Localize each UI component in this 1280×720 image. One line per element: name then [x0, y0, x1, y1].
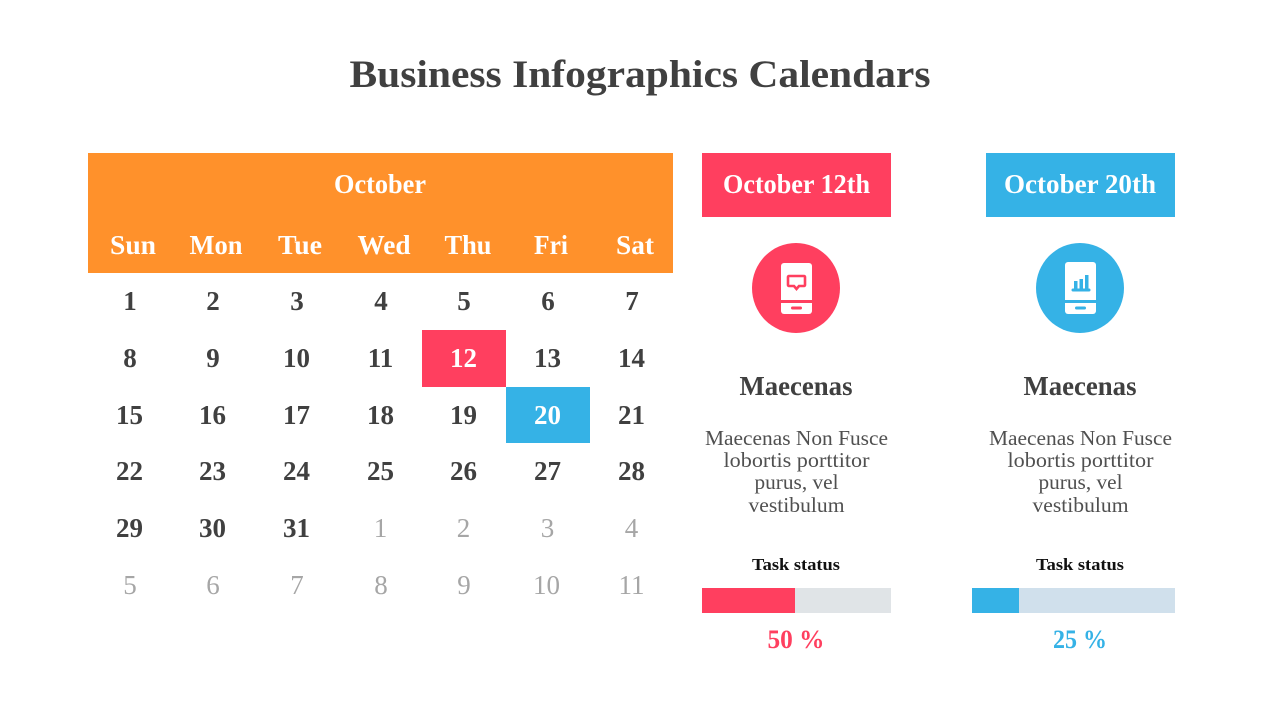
description: lobortis porttitor [724, 448, 870, 472]
date grid: 16 [199, 400, 226, 430]
date grid: 24 [283, 456, 310, 486]
progress bar 50% [702, 588, 891, 613]
highlighted day: October 20 [506, 387, 590, 443]
panel: October 12th [702, 153, 891, 654]
date grid: 17 [283, 400, 310, 430]
date grid: 28 [618, 456, 645, 486]
description: Maecenas Non Fusce [705, 426, 888, 450]
weekday labels: Wed [358, 230, 410, 260]
date grid: 1 [123, 286, 137, 316]
date grid: 4 [625, 513, 639, 543]
date grid: 6 [206, 570, 220, 600]
weekday labels: Tue [278, 230, 322, 260]
description: purus, vel [754, 470, 839, 494]
task status label: Task status [752, 555, 841, 574]
date grid: 8 [123, 343, 137, 373]
date grid: 15 [116, 400, 143, 430]
heading: Maecenas [740, 371, 852, 401]
date badge: October 12th [723, 169, 870, 199]
calendar header band [88, 153, 673, 273]
date grid: 21 [618, 400, 645, 430]
panel: calendar [88, 153, 673, 600]
date grid: 23 [199, 456, 226, 486]
date grid: 9 [206, 343, 220, 373]
date badge [702, 153, 891, 217]
date grid: 31 [283, 513, 310, 543]
progress bar 25% [972, 588, 1175, 613]
description: Maecenas Non Fusce [989, 426, 1172, 450]
date grid: 1 [374, 513, 387, 543]
percent value: 25 % [1053, 625, 1107, 654]
date grid: 29 [116, 513, 143, 543]
date grid: 9 [457, 570, 471, 600]
highlighted day: October 12 [422, 330, 506, 387]
date grid: 3 [290, 286, 304, 316]
date grid: 30 [199, 513, 226, 543]
percent value: 50 % [768, 625, 824, 654]
date grid: 13 [534, 343, 561, 373]
heading: Maecenas [1024, 371, 1136, 401]
date grid: 7 [625, 286, 639, 316]
date grid: 26 [450, 456, 477, 486]
month name: October [334, 169, 426, 199]
date grid: 18 [367, 400, 394, 430]
weekday labels: Mon [190, 230, 242, 260]
description: vestibulum [748, 493, 844, 517]
weekday labels [110, 230, 654, 260]
date grid: 22 [116, 456, 143, 486]
date grid: 12 [450, 343, 477, 373]
weekday labels: Sat [616, 230, 654, 260]
date grid: 8 [374, 570, 388, 600]
panel: October 20th [972, 153, 1175, 654]
date grid: 2 [206, 286, 220, 316]
icon: phone with chat bubble [752, 243, 840, 333]
description: lobortis porttitor [1008, 448, 1154, 472]
date grid: 4 [374, 286, 388, 316]
description: purus, vel [1038, 470, 1123, 494]
date grid: 11 [368, 343, 393, 373]
weekday labels: Fri [534, 230, 568, 260]
date grid: 27 [534, 456, 561, 486]
weekday labels: Sun [110, 230, 156, 260]
date grid: 7 [290, 570, 304, 600]
date grid [116, 286, 645, 600]
date grid: 14 [618, 343, 645, 373]
description: vestibulum [1032, 493, 1128, 517]
date grid: 20 [534, 400, 561, 430]
date grid: 19 [450, 400, 477, 430]
weekday labels: Thu [444, 230, 492, 260]
date grid: 25 [367, 456, 394, 486]
date grid: 11 [618, 570, 644, 600]
date grid: 6 [541, 286, 555, 316]
date grid: 5 [123, 570, 137, 600]
date grid: 3 [541, 513, 554, 543]
date grid: 2 [457, 513, 470, 543]
description [705, 426, 888, 517]
date grid: 10 [283, 343, 310, 373]
task status label: Task status [1036, 555, 1125, 574]
title: Business Infographics Calendars [350, 53, 930, 96]
date badge: October 20th [1004, 169, 1156, 199]
date grid: 5 [457, 286, 471, 316]
date grid: 10 [533, 570, 560, 600]
date badge [986, 153, 1175, 217]
description [989, 426, 1172, 517]
icon: phone with bar chart [1036, 243, 1124, 333]
